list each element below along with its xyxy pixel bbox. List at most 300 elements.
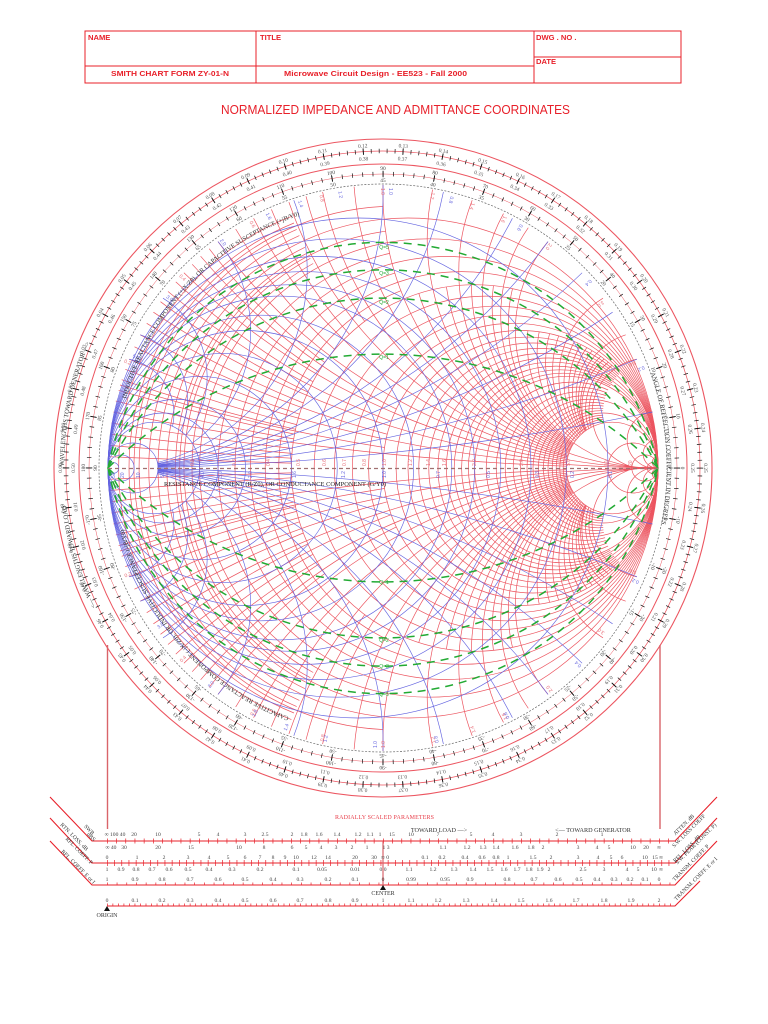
scale values: 20 — [131, 832, 137, 838]
angle scale labels: 60 — [529, 205, 537, 213]
red reactance rim labels: 1.6 — [501, 711, 509, 721]
blue axis values: 5.0 — [160, 471, 166, 478]
blue susceptance rim labels: 0.8 — [447, 196, 454, 204]
wavelength scale labels: 0.04 — [107, 611, 117, 622]
scale values: 1.4 — [492, 845, 500, 851]
scale values: 1.4 — [334, 832, 341, 838]
scale values: 0.05 — [317, 867, 327, 873]
angle scale labels: 150 — [119, 313, 129, 324]
angle scale labels: 20 — [599, 280, 607, 288]
scale values: 0.3 — [228, 867, 236, 873]
red reactance rim labels: 1.4 — [468, 202, 476, 211]
angle scale labels: 15 — [628, 321, 636, 329]
wavelength scale labels: 0.40 — [282, 170, 293, 178]
red reactance rim labels: 2.0 — [544, 242, 553, 251]
header form table — [85, 31, 681, 83]
angle scale labels: 5 — [662, 416, 669, 420]
wavelength scale labels: 0.18 — [574, 701, 586, 712]
angle scale labels: 100 — [327, 170, 336, 177]
Q circle labels: Q=3 — [379, 664, 389, 670]
Q circle labels — [379, 245, 389, 698]
right diagonal scale names — [671, 813, 719, 902]
scale values: 1.5 — [518, 898, 525, 904]
red axis values: 3.0 — [519, 459, 525, 466]
angle scale labels: 50 — [571, 235, 579, 243]
scale values: ∞ — [659, 867, 663, 873]
blue susceptance rim labels: 0.2 — [631, 577, 640, 585]
scale values: 2.5 — [262, 832, 269, 838]
angle scale labels: -45 — [379, 752, 387, 758]
scale values: 0.9 — [132, 877, 139, 883]
red axis values: 0.6 — [322, 459, 328, 466]
scale values: 0.4 — [214, 898, 222, 904]
angle scale labels: 60 — [236, 215, 244, 223]
header form table: DWG . NO . — [536, 33, 576, 42]
scale values: 20 — [155, 845, 161, 851]
wavelength scale labels: 0.35 — [477, 770, 488, 779]
wavelength scale labels: 0.47 — [91, 348, 100, 360]
scale values: 0.8 — [132, 867, 140, 873]
red axis values: 0.3 — [232, 459, 238, 466]
blue susceptance rim labels: 0.4 — [583, 278, 593, 287]
angle scale labels: -55 — [280, 734, 289, 742]
scale values: 0.7 — [530, 877, 538, 883]
angle scale labels: 10 — [649, 366, 657, 374]
red axis values: 20 — [628, 460, 634, 466]
scale values: 1.5 — [530, 855, 537, 861]
red axis values: 2.0 — [472, 459, 478, 466]
wavelength scale labels: 0.36 — [438, 780, 449, 788]
angle scale labels: -40 — [607, 656, 617, 665]
wavelength scale labels: 0.22 — [666, 576, 675, 588]
scale values: 5 — [610, 855, 613, 861]
scale values: 1 — [382, 898, 385, 904]
scale values: ∞ 0 — [381, 855, 389, 861]
scale values: 1.2 — [430, 867, 437, 873]
scale values: 0.2 — [158, 898, 166, 904]
wavelength scale labels: 0.06 — [143, 242, 154, 253]
scale values: 2 — [550, 855, 553, 861]
scale values: 0.9 — [352, 898, 359, 904]
blue susceptance rim labels: 2.0 — [207, 680, 216, 690]
scale ticks — [107, 841, 675, 905]
red reactance rim labels: 0.8 — [319, 734, 327, 742]
left diagonal scale names: RTN. LOSS, dB — [59, 822, 89, 853]
curved ring captions: <— WAVELENGTHS TOWARD LOAD — [62, 506, 94, 608]
outer rings — [54, 139, 712, 797]
scale values: 6 — [621, 855, 624, 861]
blue susceptance rim labels: 1.0 — [373, 741, 379, 748]
scale values: 3 — [577, 845, 580, 851]
origin marker — [96, 906, 118, 919]
scale values: 0.1 — [422, 855, 429, 861]
angle scale labels: 160 — [98, 361, 106, 371]
wavelength scale labels: 0.15 — [477, 157, 488, 166]
blue axis values: 2.0 — [248, 471, 254, 478]
scale values: 4 — [596, 845, 599, 851]
wavelength scale labels: 0.14 — [435, 768, 446, 775]
red reactance rim labels: 0.8 — [318, 194, 325, 203]
scale values: 0.5 — [242, 898, 249, 904]
scale values: 0.4 — [594, 877, 601, 883]
scale values: 1.3 — [462, 898, 470, 904]
scale values: 0.8 — [324, 898, 332, 904]
header form table: Microwave Circuit Design - EE523 - Fall 2000 — [284, 69, 467, 78]
scale values: 5 — [227, 855, 230, 861]
wavelength scale labels: 0.24 — [699, 423, 706, 433]
scale values: 1.7 — [514, 867, 521, 873]
scale values: 0.2 — [256, 867, 264, 873]
wavelength scale labels: 0.13 — [397, 773, 407, 780]
blue axis values: 10 — [136, 472, 142, 478]
angle scale labels: -30 — [522, 712, 531, 721]
red reactance rim labels: 1.2 — [428, 192, 436, 200]
red axis values: 5.0 — [566, 459, 572, 466]
scale values: 30 — [121, 845, 127, 851]
wavelength scale labels: 0.38 — [358, 786, 368, 793]
scale values: 4 — [492, 832, 495, 838]
left diagonal scale names: RFL. COEFF. E or I — [59, 849, 96, 886]
angle scale labels: 35 — [478, 195, 485, 202]
angle scale labels: 110 — [276, 183, 286, 191]
wavelength scale labels: 0.08 — [212, 724, 223, 734]
scale values: 0.2 — [438, 855, 446, 861]
left diagonal scale names: dBS — [85, 832, 96, 843]
red reactance rim labels: 3.0 — [596, 299, 605, 308]
wavelength scale labels: 0.34 — [509, 184, 520, 193]
left diagonal scale names: RFL. COEFF. P — [64, 836, 94, 866]
angle scale labels: -120 — [227, 722, 239, 732]
scale values: 15 — [188, 845, 194, 851]
blue susceptance rim labels: 1.2 — [336, 191, 344, 199]
wavelength scale labels: 0.45 — [117, 651, 128, 663]
blue susceptance rim labels: 1.6 — [251, 709, 260, 718]
angle scale labels: 80 — [110, 366, 117, 373]
angle scale labels: -85 — [97, 513, 104, 522]
Q circle labels: Q=2 — [379, 300, 389, 306]
wavelength scale labels: 0.33 — [543, 202, 554, 212]
angle scale labels: 10 — [674, 413, 681, 420]
scale values: 1.5 — [486, 867, 494, 873]
Q circle labels: Q=3 — [379, 271, 389, 277]
scale values: 4 — [320, 845, 323, 851]
scale values: 2 — [556, 832, 559, 838]
blue susceptance rim labels: 3.0 — [165, 294, 174, 303]
scale values: 0.2 — [324, 877, 332, 883]
angle scale labels: -130 — [185, 691, 197, 703]
scale values: ∞ — [657, 845, 661, 851]
wavelength scale labels: 0.16 — [509, 743, 520, 752]
wavelength scale labels: 0.07 — [172, 214, 184, 225]
scale values: 0.4 — [462, 855, 469, 861]
angle scale labels: -140 — [148, 654, 159, 666]
scale values: 3 — [520, 832, 523, 838]
scale values: 12 — [311, 855, 317, 861]
center marker — [371, 885, 395, 897]
angle scale labels: -65 — [194, 683, 203, 692]
radially scaled parameter scales — [50, 797, 719, 919]
wavelength scale labels: 0.17 — [543, 724, 554, 734]
angle scale labels: -80 — [431, 759, 439, 766]
red reactance rim labels: 1.0 — [381, 741, 387, 748]
wavelength scale labels: 0.02 — [67, 382, 75, 393]
center marker: CENTER — [371, 891, 395, 897]
wavelength scale labels: 0.46 — [107, 313, 117, 325]
wavelength scale labels: 0.28 — [666, 349, 675, 360]
scale values: 3 — [335, 845, 338, 851]
scale values: 2 — [658, 898, 661, 904]
scale values: 1.8 — [600, 898, 608, 904]
scale values: 0.6 — [554, 877, 562, 883]
wavelength scale labels: 0.01 — [60, 422, 67, 433]
right diagonal scale names: TRANSM. COEFF. P — [672, 844, 711, 883]
wavelength scale labels: 0.23 — [678, 540, 686, 550]
scale values: 1.2 — [434, 898, 442, 904]
scale values: 1.4 — [490, 898, 498, 904]
red reactance rim labels: 1.0 — [379, 188, 385, 195]
scale values: 6 — [244, 855, 247, 861]
wavelength scale labels: 0.02 — [80, 539, 88, 550]
wavelength scale labels: 0.35 — [473, 170, 484, 179]
wavelength scale labels: 0.26 — [686, 424, 693, 435]
Q circle labels: Q=5 — [379, 692, 389, 698]
wavelength scale labels: 0.48 — [80, 386, 88, 396]
wavelength scale labels: 0.33 — [550, 735, 561, 745]
scale values: 8 — [272, 855, 275, 861]
angle scale labels: 20 — [660, 362, 668, 370]
scale values: 0 — [106, 898, 109, 904]
scale values: 7 — [437, 832, 440, 838]
scale values: 0.7 — [186, 877, 194, 883]
angle scale labels: 90 — [380, 166, 386, 172]
scale values: 1 — [106, 877, 109, 883]
scale values: 1 — [379, 832, 382, 838]
blue susceptance rim labels: 0.8 — [433, 735, 441, 743]
blue conductance and susceptance grid — [108, 185, 652, 751]
scale values: 5 — [305, 845, 308, 851]
wavelength scale labels: 0.25 — [689, 463, 695, 473]
right diagonal scale names: RFL. LOSS, dB — [672, 834, 702, 864]
scale values: 1.8 — [526, 867, 533, 873]
scale values: 0 — [382, 877, 385, 883]
scale values: 1.9 — [536, 867, 544, 873]
wavelength scale labels: 0.13 — [398, 143, 408, 150]
blue susceptance rim labels: 0.4 — [574, 659, 583, 668]
angle scale labels: -50 — [570, 692, 580, 702]
origin marker: ORIGIN — [96, 913, 118, 919]
scale values: 1.2 — [354, 832, 362, 838]
scale values: 4 — [597, 855, 600, 861]
scale values: 1.6 — [546, 898, 553, 904]
wavelength scale labels: 0.36 — [436, 161, 446, 168]
red reactance rim labels: 1.2 — [430, 736, 437, 744]
Q circle labels: Q=5 — [379, 245, 389, 251]
angle scale labels: 45 — [380, 178, 386, 184]
scale values: 2 — [291, 832, 294, 838]
wavelength scale labels: 0.27 — [678, 386, 686, 397]
green dashed constant Q circles — [108, 242, 658, 694]
chart grid — [108, 185, 658, 751]
scale values: 2 — [163, 855, 166, 861]
blue axis values: 1.2 — [341, 471, 347, 478]
scale values: 10 — [630, 845, 636, 851]
scale values: 1 3 — [382, 845, 390, 851]
scale values: 1.9 — [628, 898, 635, 904]
angle scale labels: 65 — [195, 244, 203, 252]
scale values: 1.1 — [406, 867, 413, 873]
scale values: 1.7 — [572, 898, 580, 904]
wavelength scale labels: 0.03 — [79, 344, 88, 355]
scale values: 1.1 — [440, 845, 447, 851]
wavelength scale labels: 0.43 — [180, 224, 192, 235]
wavelength scale labels: 0.06 — [152, 674, 163, 685]
scale values: 0.6 — [166, 867, 173, 873]
angle scale labels: 85 — [97, 415, 104, 421]
red axis values: 0.7 — [342, 459, 348, 466]
angle scale labels: 30 — [638, 315, 646, 323]
scale values: 1.4 — [470, 867, 477, 873]
scale values: 0.7 — [296, 898, 304, 904]
scale values: 0.95 — [440, 877, 450, 883]
wavelength scale labels: 0.32 — [582, 711, 594, 722]
angle scale labels: 70 — [482, 183, 489, 191]
blue axis values: 0.7 — [436, 471, 442, 478]
scale values: 1.3 — [480, 845, 487, 851]
right diagonal scale names: TRANSM. COEFF. E or I — [673, 856, 719, 902]
red axis values: 1.0 — [382, 459, 388, 466]
blue axis values: 50 — [111, 472, 117, 478]
scale values: 0.8 — [504, 877, 511, 883]
wavelength scale labels: 0.45 — [128, 281, 138, 292]
scale values: 1.3 — [450, 867, 458, 873]
angle scale labels: 90 — [93, 465, 99, 471]
wavelength scale labels: 0.32 — [574, 225, 586, 235]
toward load and generator captions: <— TOWARD GENERATOR — [555, 827, 632, 834]
scale values: 0.1 — [132, 898, 139, 904]
left diagonal scale names: SWR — [82, 824, 95, 837]
blue susceptance rim labels: 0.6 — [515, 223, 524, 232]
curved ring captions: INDUCTIVE REACTANCE COMPONENT (+jX/Z0), OR CAPACITIVE SUSCEPTANCE (+jB/Y0) — [122, 212, 299, 399]
scale values: 1.6 — [316, 832, 323, 838]
wavelength scale labels: 0.04 — [96, 307, 106, 318]
scale values: ∞ 40 — [106, 845, 117, 851]
red reactance rim labels: 5.0 — [629, 567, 637, 575]
wavelength scale labels: 0.23 — [691, 383, 699, 394]
wavelength scale labels: 0.22 — [678, 344, 687, 355]
wavelength scale labels: 0.49 — [73, 424, 80, 434]
scale values: 1 — [136, 855, 139, 861]
wavelength scale labels: 0.44 — [143, 683, 154, 694]
wavelength scale labels: 0.42 — [212, 202, 223, 212]
red reactance rim labels: 0.4 — [177, 273, 187, 283]
wavelength scale labels: 0.37 — [398, 786, 408, 793]
scale values: 4 — [626, 867, 629, 873]
angle scale labels: 40 — [608, 272, 616, 280]
scale values: 3 — [187, 855, 190, 861]
scale values: 1 — [366, 845, 369, 851]
Q circle labels: Q=1 — [379, 580, 389, 586]
scale values: 1 — [106, 867, 109, 873]
angle scale labels: -75 — [130, 607, 139, 616]
angle scale labels: 50 — [330, 182, 337, 189]
header form table: DATE — [536, 57, 556, 66]
connector lines to scales — [108, 645, 660, 829]
scale values: 0.3 — [186, 898, 194, 904]
scale values: 1.2 — [464, 845, 471, 851]
angle scale labels: 80 — [432, 170, 438, 177]
wavelength scale labels: 0.30 — [638, 652, 649, 663]
wavelength scale labels: 0.08 — [205, 191, 216, 201]
red axis values: 0.8 — [362, 459, 368, 466]
red axis values: 1.4 — [426, 459, 432, 466]
wavelength scale labels: 0.46 — [96, 617, 106, 629]
red axis values — [190, 459, 634, 466]
angle scale labels: 0 — [667, 467, 673, 470]
wavelength scale labels: 0.41 — [246, 184, 257, 193]
angle scale labels: 130 — [186, 234, 196, 244]
scale values: 0.9 — [118, 867, 125, 873]
wavelength scale labels: 0.26 — [699, 503, 706, 514]
wavelength scale labels: 0.29 — [649, 314, 659, 325]
blue susceptance rim labels: 1.2 — [323, 735, 330, 743]
wavelength scale labels: 0.21 — [660, 307, 670, 319]
wavelength scale labels: 0.39 — [317, 780, 328, 788]
blue susceptance rim labels: 1.6 — [264, 212, 272, 221]
blue susceptance rim labels: 0.6 — [503, 711, 511, 720]
wavelength scale labels: 0.30 — [628, 281, 638, 292]
wavelength scale labels: 0.31 — [612, 683, 623, 694]
angle scale labels: 40 — [430, 182, 436, 189]
wavelength scale labels: 0.01 — [73, 501, 80, 512]
wavelength scale labels: 0.31 — [603, 251, 614, 262]
scale values: 10 — [408, 832, 414, 838]
scale values: 14 — [325, 855, 331, 861]
wavelength scale labels: 0.03 — [91, 576, 100, 587]
curved ring captions: ANGLE OF REFLECTION COEFFICIENT IN DEGREES — [650, 373, 672, 524]
toward load and generator captions — [411, 827, 632, 834]
wavelength scale labels: 0.38 — [359, 156, 369, 163]
wavelength scale labels: 0.39 — [320, 161, 331, 168]
Q circle labels: Q=1 — [379, 355, 389, 361]
red axis values: 1.2 — [408, 459, 414, 466]
scale values: 0.8 — [492, 855, 500, 861]
curved ring captions: CAPACITIVE REACTANCE COMPONENT (-jX/Z0), OR INDUCTIVE SUSCEPTANCE (-jB/Y0) — [120, 530, 288, 720]
wavelength scale labels: 0.19 — [603, 674, 614, 685]
wavelength scale labels: 0.18 — [583, 215, 594, 225]
scale values: 10 — [642, 855, 648, 861]
wavelength scale labels: 0.20 — [638, 273, 649, 285]
scale values: 0.5 — [184, 867, 192, 873]
blue susceptance rim labels: 2.0 — [218, 238, 227, 247]
scale values: 10 — [651, 867, 657, 873]
angle scale labels: 170 — [85, 411, 92, 421]
blue susceptance rim labels: 1.4 — [283, 723, 291, 732]
scale values: 0.6 — [478, 855, 486, 861]
angle scale labels: 75 — [131, 320, 139, 328]
red reactance rim labels: 1.6 — [499, 215, 508, 224]
scale lines — [50, 797, 717, 906]
wavelength scale labels: 0.37 — [398, 156, 408, 163]
angle scale labels: -60 — [235, 712, 244, 721]
angle scale labels: 120 — [228, 204, 239, 214]
scale values: 9 — [284, 855, 287, 861]
wavelength scale labels: 0.43 — [172, 711, 183, 721]
right diagonal scale names: ATTEN. dB — [673, 813, 696, 837]
scale values: 0.5 — [242, 877, 249, 883]
angle scale labels: -100 — [325, 759, 336, 766]
blue susceptance rim labels — [126, 188, 645, 748]
scale values: 0.8 — [158, 877, 166, 883]
